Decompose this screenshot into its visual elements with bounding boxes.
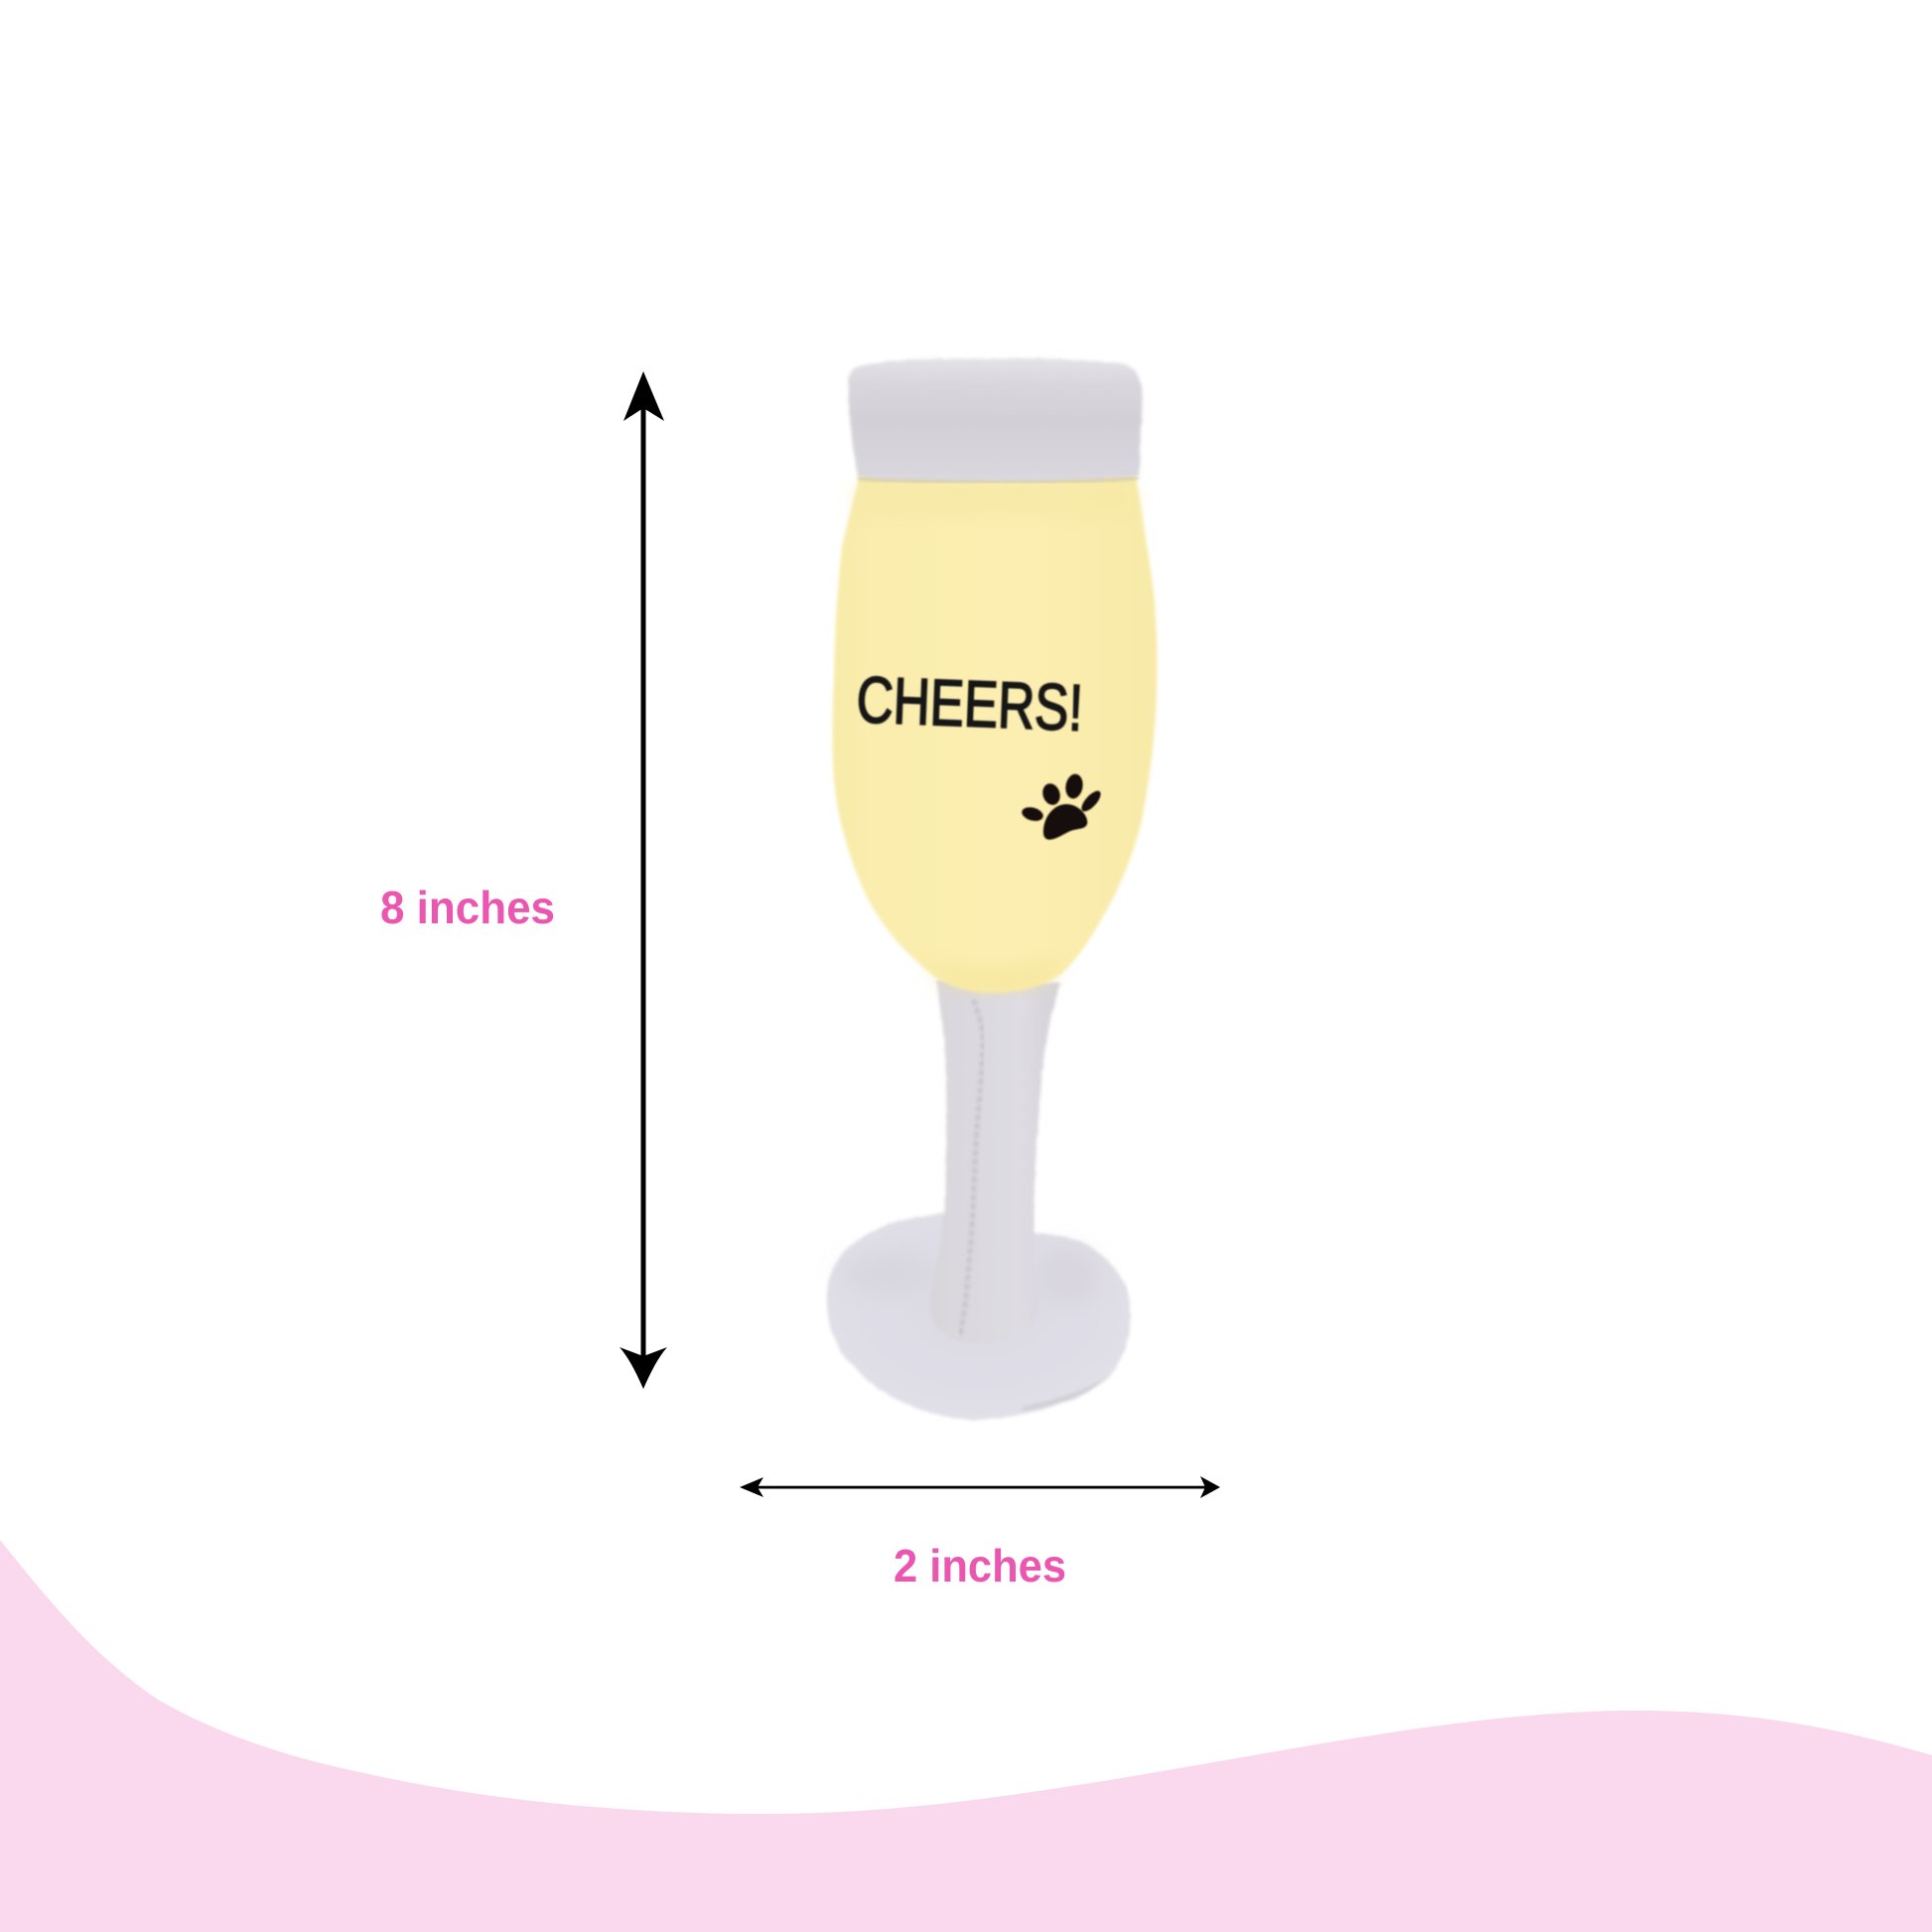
background: pink wave <box>0 1540 1932 1932</box>
arrow: height dimension <box>620 371 667 1389</box>
stem seam <box>960 1000 983 1337</box>
glass stem <box>928 980 1060 1343</box>
label: height: 8 inches <box>380 882 555 933</box>
glass rim <box>848 358 1143 483</box>
plush champagne glass toy <box>827 358 1157 1420</box>
embroidered word: CHEERS!: CHEERS! <box>855 662 1084 745</box>
arrow: width dimension <box>740 1476 1220 1498</box>
icon: paw print <box>1021 772 1104 840</box>
label: width: 2 inches <box>894 1540 1066 1591</box>
glass bowl <box>832 467 1157 993</box>
glass foot <box>827 1213 1131 1420</box>
